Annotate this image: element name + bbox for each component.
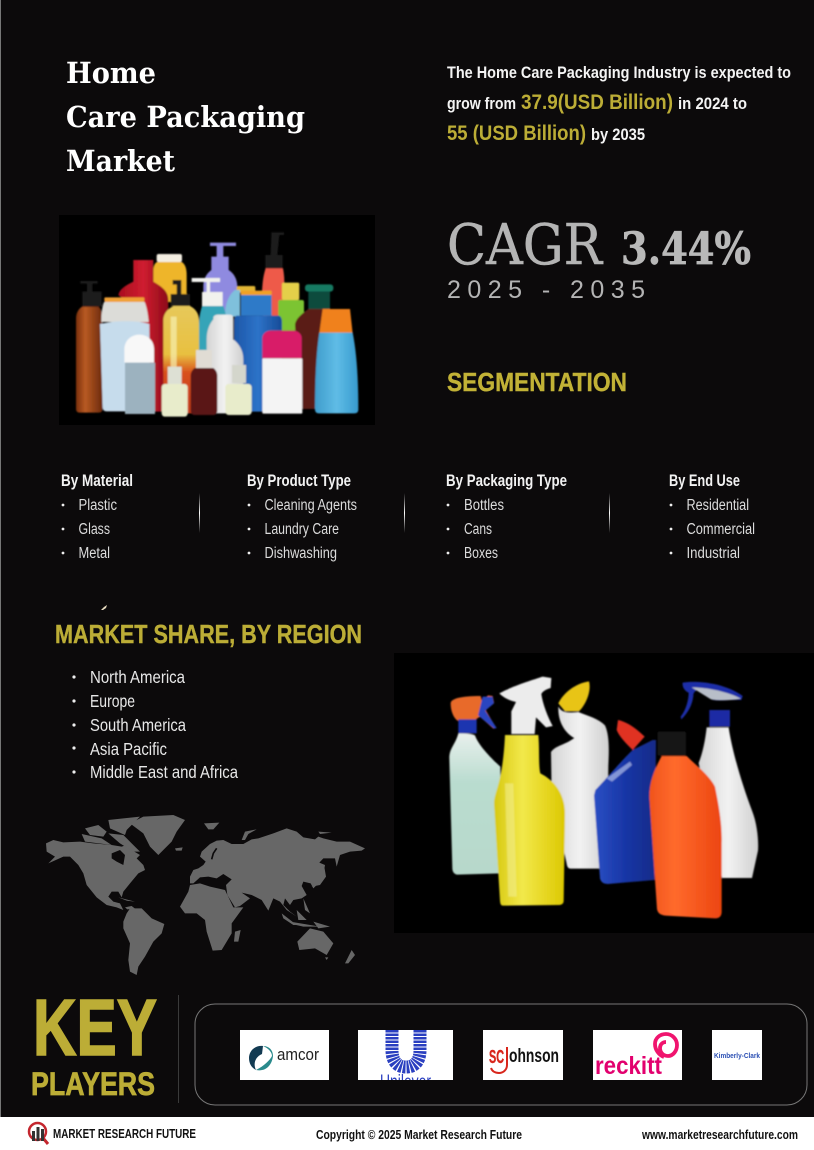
map: south america, africa, australia (123, 883, 355, 975)
logo: amcor (240, 1030, 329, 1080)
segment: by material (61, 472, 133, 562)
segment: by material: Glass (78, 521, 110, 538)
image: spray and cleaning bottles (394, 653, 814, 933)
bottle: pale blue with yellow cap (237, 286, 255, 293)
logo: unilever (358, 1030, 453, 1080)
key players panel (195, 1004, 807, 1105)
logo: sc johnson: ohnson (509, 1046, 559, 1067)
logo: amcor: amcor (277, 1045, 319, 1064)
segment: by packaging type: Bottles (464, 497, 504, 514)
bottle: red pump (262, 232, 285, 317)
segment: by product type: Cleaning Agents (264, 497, 357, 514)
bottle: blue angled (617, 720, 645, 750)
segment: by end use (669, 472, 755, 562)
market forecast text: 55 (USD Billion) (447, 122, 586, 145)
title: Care Packaging (66, 100, 305, 134)
logo: kimberly-clark (712, 1030, 762, 1080)
region list: North America (90, 667, 185, 687)
CAGR callout: CAGR (447, 213, 604, 278)
heading: segmentation: SEGMENTATION (447, 367, 627, 397)
segment: by product type: By Product Type (247, 472, 351, 490)
bottle: red (118, 260, 168, 412)
icon: market research future logo (29, 1123, 48, 1144)
bottle: white toilet cleaner (558, 681, 590, 711)
title: Market (66, 144, 176, 178)
logo: sc johnson (483, 1030, 563, 1080)
region list (72, 667, 238, 782)
region list: Asia Pacific (90, 739, 167, 759)
segment: by end use: Commercial (686, 521, 755, 538)
segment: by material: By Material (61, 472, 133, 490)
footer: Copyright © 2025 Market Research Future (316, 1127, 522, 1142)
logo: kimberly-clark: Kimberly-Clark (714, 1053, 760, 1060)
CAGR callout (447, 213, 751, 304)
image: assorted home care bottles (59, 215, 375, 425)
segment: by packaging type: By Packaging Type (446, 472, 567, 490)
bottle: green with yellow cap (282, 283, 299, 300)
logo: unilever: Unilever (380, 1072, 431, 1093)
CAGR callout: 2025 - 2035 (447, 276, 645, 304)
segment: by product type: Laundry Care (264, 521, 339, 538)
bottle: roll-on (124, 335, 154, 363)
logo: reckitt (593, 1030, 682, 1080)
heading: key players: PLAYERS (31, 1066, 155, 1102)
bottle: small maroon (196, 350, 212, 368)
bottle: white centre (207, 315, 243, 413)
bottle: pale green spray (451, 695, 496, 729)
bottle: amber oil pump (171, 280, 190, 306)
segment: by packaging type: Boxes (464, 545, 498, 562)
CAGR callout: 3.44% (621, 224, 751, 275)
segment: by end use: Industrial (686, 545, 740, 562)
footer: MARKET RESEARCH FUTURE (53, 1126, 196, 1141)
bottle: yellow spray (499, 677, 553, 734)
bottle: small cream left (168, 367, 182, 384)
market forecast text: grow from (447, 95, 516, 113)
bottle: orange (658, 732, 686, 756)
bottle: white spray right (681, 682, 743, 719)
title: Home (66, 56, 156, 90)
heading: key players: KEY (33, 983, 157, 1072)
market forecast text: 37.9(USD Billion) (521, 91, 673, 114)
map: americas and greenland (46, 815, 185, 910)
segment: by material: Metal (78, 545, 110, 562)
market forecast text: in 2024 to (678, 95, 747, 113)
heading: key players (31, 983, 157, 1102)
segment: by material: Plastic (78, 497, 117, 514)
bottle: yellow cap (157, 254, 182, 262)
bottle: amber pump left (80, 281, 102, 306)
segment: by packaging type: Cans (464, 521, 492, 538)
bottle: light blue flat (104, 297, 144, 302)
segment: by end use: By End Use (669, 472, 740, 490)
segment: by product type (247, 472, 357, 562)
logo: reckitt: reckitt (595, 1052, 663, 1080)
title (66, 56, 305, 178)
segment: by end use: Residential (686, 497, 749, 514)
bottle: blue (241, 291, 272, 295)
bottle: teal pump (192, 278, 223, 307)
region list: South America (90, 715, 186, 735)
map: eurasia and islands (190, 823, 365, 928)
world map (46, 815, 365, 975)
segment: by product type: Dishwashing (264, 545, 337, 562)
footer (0, 1117, 814, 1150)
bottle: light blue with orange (319, 309, 353, 333)
bottle: small cream right (232, 365, 246, 383)
segment: by packaging type (446, 472, 567, 562)
bottle: purple pump (203, 243, 237, 317)
market forecast text: by 2035 (591, 126, 645, 144)
market forecast text (447, 64, 791, 145)
bottle: brown with green cap (305, 284, 333, 292)
heading: market share by region: MARKET SHARE, BY REGION (55, 619, 362, 649)
region list: Middle East and Africa (90, 762, 238, 782)
region list: Europe (90, 691, 135, 711)
stick: pink deodorant (262, 331, 302, 358)
logo: sc johnson: SC (489, 1047, 504, 1067)
